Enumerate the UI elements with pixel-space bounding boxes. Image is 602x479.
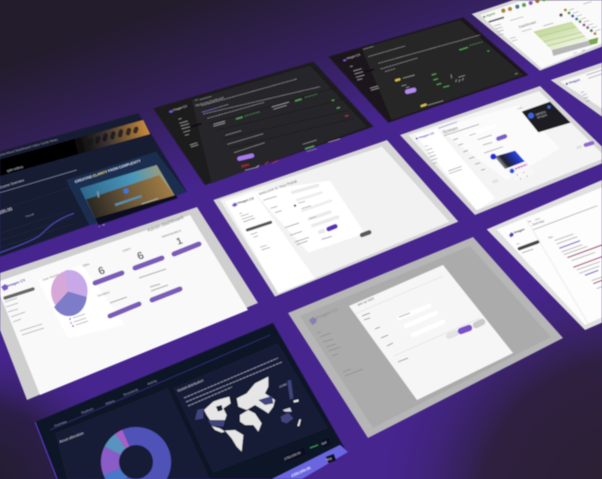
dark preview card: IMAGEN [535, 110, 546, 117]
value chips: Sell [321, 440, 327, 446]
area chart [533, 22, 598, 56]
description line [533, 206, 597, 230]
card: metric value three: Administrators [161, 228, 182, 239]
purple button [407, 90, 414, 92]
panel: theme configuration [400, 86, 602, 215]
sidebar text [517, 243, 533, 253]
dark preview card [517, 102, 571, 132]
default button [494, 176, 497, 187]
page heading: Journey [531, 219, 545, 227]
heading text: Monitoring Dashboard [195, 96, 225, 108]
brand logo: Imagen CX [346, 53, 361, 60]
panel: asset allocation and world map [35, 323, 348, 479]
tab labels: Positions [81, 407, 94, 415]
card: metric value three [161, 228, 199, 254]
cancel button [449, 333, 456, 336]
text rows [363, 35, 480, 72]
video card [66, 152, 186, 227]
panel: welcome portal [213, 140, 458, 297]
hero banner [0, 120, 150, 176]
panel: dark settings right [328, 17, 528, 123]
player bar [95, 195, 178, 225]
tab labels: History [105, 399, 116, 406]
world map: 10,000 [278, 382, 288, 389]
tab labels: Overview [54, 419, 68, 428]
breadcrumb [528, 218, 540, 222]
card: metric value one: 6 [96, 265, 107, 278]
input rows [225, 131, 265, 153]
panel: admin dashboard [0, 207, 258, 400]
navigation labels: ome About Dashboard Video Guide News [0, 137, 59, 157]
select value [399, 313, 410, 317]
sidebar selection [519, 242, 538, 249]
value chips: £750,000.00 [284, 451, 302, 461]
forgotten link [322, 236, 332, 239]
panel: content review list [487, 180, 602, 330]
map scale legend [287, 380, 293, 399]
card: user activity pie [38, 265, 125, 338]
metric footnote [245, 165, 259, 170]
brand logo: Imagen [513, 227, 525, 235]
description [444, 124, 479, 136]
highlighted purple rows [559, 241, 598, 275]
card: metric value two: 6 [135, 250, 146, 263]
sidebar menu [239, 213, 271, 250]
small sparkline [265, 161, 278, 164]
value chips [284, 440, 330, 461]
brand logo: Imagen CX [7, 278, 27, 288]
form inputs [293, 185, 338, 226]
purple toggle button [498, 136, 505, 139]
total value bar [272, 445, 348, 479]
sidebar menu [489, 17, 504, 22]
brand logo: Imagen CX [315, 307, 338, 320]
brand logo [509, 227, 525, 237]
icon: play button [123, 188, 129, 194]
world map [195, 377, 301, 452]
brand logo [232, 196, 255, 207]
pie legend [69, 314, 88, 327]
yellow tags [396, 79, 426, 106]
modal dialog [349, 265, 513, 400]
map description [184, 358, 282, 406]
card: domains: Domains [97, 290, 111, 298]
brand logo: ◆ Imagen [564, 78, 581, 86]
card: metric value two [122, 246, 162, 268]
brand logo: Imagen CX [172, 104, 188, 112]
total value bar: Buy [326, 456, 333, 462]
admin heading: Admin dashboard [146, 215, 185, 234]
video title: CREATING CLARITY FROM COMPLEXITY [74, 159, 142, 184]
tab labels: Activity [147, 379, 158, 386]
main area divider [527, 220, 588, 324]
description text rows [195, 79, 320, 118]
chart axis labels [573, 50, 585, 53]
background menu [317, 332, 363, 376]
grid lines [0, 187, 75, 247]
page heading: gain videos [6, 165, 24, 173]
card: domains [97, 290, 139, 316]
card: metric value three: 1 [175, 236, 185, 248]
panel: white top right [551, 63, 602, 117]
color picker [490, 151, 535, 181]
purple save button [329, 226, 335, 229]
metric values [303, 140, 317, 144]
icon row [501, 0, 546, 13]
card: latest activity [139, 269, 180, 300]
card: metric value one: Sites [82, 262, 91, 268]
form inputs [468, 126, 494, 135]
status row text [213, 102, 289, 126]
brand logo [1, 278, 27, 291]
form labels [453, 138, 485, 170]
text rows [510, 17, 553, 32]
disabled button [476, 322, 482, 325]
card: metric value one [82, 262, 122, 283]
donut chart [110, 436, 162, 479]
highlighted pink rows [567, 245, 602, 284]
card: user activity pie: User Activity [42, 272, 60, 282]
form inputs [399, 306, 443, 335]
card: metric value two: Users [122, 246, 132, 253]
breadcrumb [438, 122, 457, 128]
panel: dark settings left [153, 62, 373, 185]
legend labels [569, 2, 601, 31]
green status values [236, 99, 340, 119]
sidebar menu [425, 146, 462, 174]
card: global distribution [173, 343, 328, 473]
red status value [345, 114, 348, 118]
sidebar menu [5, 289, 44, 335]
skyline silhouettes [90, 129, 136, 143]
pie chart [51, 270, 88, 316]
purple save button [461, 328, 469, 331]
sidebar menu [178, 118, 198, 147]
total value bar: £250,000.00 [291, 466, 311, 478]
tab labels: Documents [123, 387, 139, 397]
tab labels [54, 379, 158, 428]
panel: green analytics [472, 0, 602, 71]
separator [355, 276, 480, 356]
label text [402, 73, 518, 105]
dark preview card: Logo [517, 107, 524, 111]
small toggle [559, 13, 563, 17]
panel: modal over grey page [288, 237, 563, 438]
brand logo: ◆ Imagen CX [414, 131, 436, 141]
spark values [451, 74, 465, 82]
list heading: Test [547, 235, 554, 240]
dashboard heading: Dashboard [518, 20, 537, 29]
purple save button [239, 156, 252, 159]
text rows [581, 70, 602, 102]
form labels [362, 313, 408, 362]
legend dots [564, 8, 596, 35]
map heading: Global distribution [177, 378, 204, 393]
card: asset allocation: Asset allocation [59, 431, 84, 444]
dark preview card: STUDIO [536, 113, 548, 120]
welcome heading: Welcome to Your Portal [258, 179, 298, 196]
cancel button [320, 231, 323, 232]
page heading: Screen [442, 126, 459, 136]
modal title: Set Up SSO [357, 296, 375, 307]
brand logo: ◆ Agent [481, 11, 497, 19]
brand logo: Imagen CX [237, 196, 255, 205]
green status [432, 47, 489, 87]
form labels [263, 196, 309, 245]
video frame [80, 165, 176, 222]
panel: video dashboard [0, 113, 187, 257]
action buttons [578, 147, 580, 148]
review rows [555, 234, 602, 289]
stat label: Overall [25, 212, 35, 218]
brand logo [309, 307, 338, 325]
row separators [209, 87, 353, 148]
red warning text: $40s [241, 163, 250, 169]
dark button [362, 232, 369, 235]
sidebar menu [350, 66, 379, 90]
card: asset allocation [55, 388, 210, 479]
line chart curve [0, 213, 74, 253]
